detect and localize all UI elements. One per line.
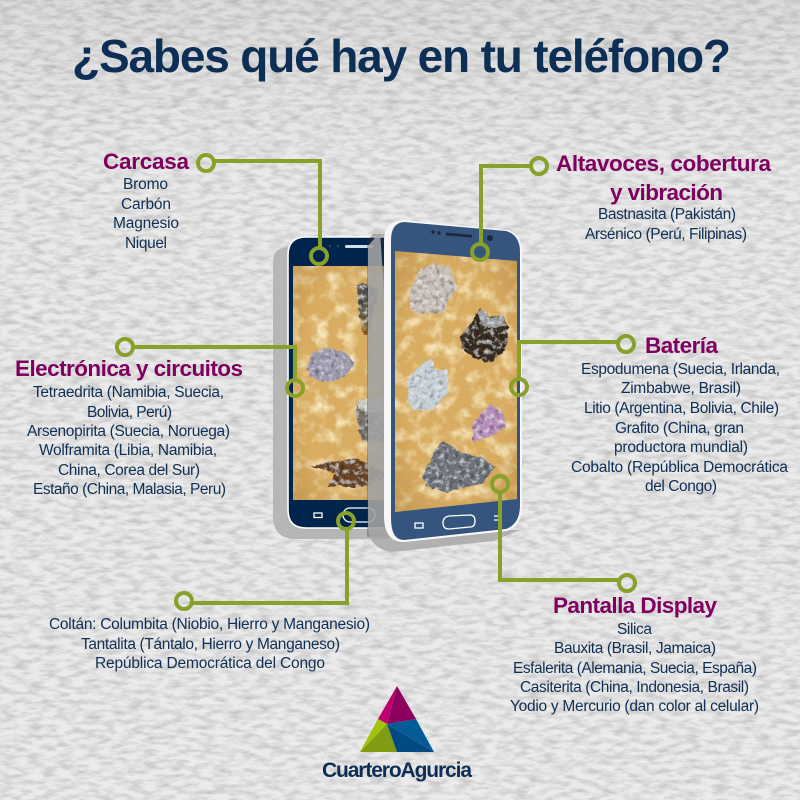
phone: front: [368, 220, 522, 552]
connector: Altavoces: [472, 158, 547, 260]
text block: Electrónica: Tetraedrita (Namibia, Suecia,: [33, 384, 224, 401]
front phone buttons: [415, 515, 500, 529]
text block: Batería: Grafito (China, gran: [615, 420, 744, 437]
mineral: blue crystal: [407, 358, 448, 410]
title: ¿Sabes qué hay en tu teléfono?: [72, 30, 731, 82]
text block: Batería: Litio (Argentina, Bolivia, Chile): [584, 400, 779, 417]
text block: Electrónica: Wolframita (Libia, Namibia,: [39, 442, 217, 459]
front phone cast strip: [367, 234, 393, 537]
text block: Pantalla Display: Esfalerita (Alemania, Suecia, España): [513, 660, 757, 677]
text block: Altavoces: [556, 151, 771, 243]
text block: Altavoces: Altavoces, cobertura: [556, 151, 771, 176]
text block: Pantalla Display: [510, 593, 759, 715]
front phone screen: [395, 251, 517, 512]
mineral: pink kunzite: [473, 404, 506, 442]
phone: back: [273, 234, 393, 539]
mineral: pale quartz: [410, 263, 457, 314]
text block: Batería: Espodumena (Suecia, Irlanda,: [581, 361, 780, 378]
connector: Pantalla: [492, 476, 635, 591]
front phone body: [391, 222, 520, 540]
text block: Pantalla Display: Yodio y Mercurio (dan color al celular): [510, 698, 759, 715]
connector: Carcasa: [198, 155, 327, 264]
text block: Electrónica: [15, 356, 243, 498]
back phone speaker: [329, 245, 373, 248]
text block: Carcasa: [103, 149, 189, 252]
logo triangle: [360, 686, 434, 752]
back phone body: [288, 237, 388, 528]
text block: Pantalla Display: Bauxita (Brasil, Jamaica): [554, 640, 716, 657]
text block: Carcasa: Bromo: [123, 176, 168, 193]
text block: Batería: Cobalto (República Democrática: [571, 459, 788, 476]
text block: Carcasa: Carbón: [121, 196, 171, 213]
back phone shadow: [273, 247, 393, 539]
text block: Carcasa: Magnesio: [113, 215, 179, 232]
text block: Electrónica: China, Corea del Sur): [58, 462, 200, 479]
text block: Coltán: Coltán: Columbita (Niobio, Hierro y Manganesio): [49, 616, 370, 633]
connector: Batería: [511, 336, 634, 395]
front phone minerals: [407, 263, 509, 492]
back phone buttons: [314, 508, 375, 522]
mineral: silver ore: [422, 440, 495, 492]
text block: Altavoces: Arsénico (Perú, Filipinas): [585, 226, 747, 243]
mineral: dark ore: [460, 308, 509, 363]
text block: Batería: [571, 333, 788, 495]
text block: Batería: Zimbabwe, Brasil): [621, 380, 741, 397]
text block: Batería: del Congo): [645, 478, 717, 495]
front phone speaker: [431, 230, 493, 241]
text block: Altavoces: Bastnasita (Pakistán): [598, 206, 736, 223]
text block: Coltán: República Democrática del Congo: [95, 655, 325, 672]
text block: Pantalla Display: Pantalla Display: [553, 593, 717, 618]
front phone white bezel: [384, 220, 522, 542]
text block: Pantalla Display: Casiterita (China, Indonesia, Brasil): [520, 679, 749, 696]
text block: Carcasa: Niquel: [125, 235, 167, 252]
text block: Electrónica: Bolivia, Perú): [87, 404, 172, 421]
text block: Electrónica: Electrónica y circuitos: [15, 356, 243, 381]
text block: Coltán: [49, 616, 370, 672]
text block: Pantalla Display: Silica: [617, 621, 652, 638]
text block: Electrónica: Estaño (China, Malasia, Peru): [33, 481, 226, 498]
text block: Altavoces: y vibración: [610, 180, 723, 205]
text block: Batería: Batería: [645, 333, 718, 358]
connector: Coltán: [176, 513, 354, 609]
text block: Batería: productora mundial): [614, 439, 748, 456]
text block: Coltán: Tantalita (Tántalo, Hierro y Manganeso): [81, 636, 340, 653]
front phone shadow: [368, 232, 520, 552]
text block: Electrónica: Arsenopirita (Suecia, Noruega): [27, 423, 230, 440]
text block: Carcasa: Carcasa: [103, 149, 189, 174]
logo wordmark: CuarteroAgurcia: [322, 759, 472, 782]
logo: [322, 686, 472, 782]
connector: Electrónica: [117, 339, 303, 396]
back phone minerals: [307, 283, 392, 488]
back phone screen: [293, 266, 385, 500]
